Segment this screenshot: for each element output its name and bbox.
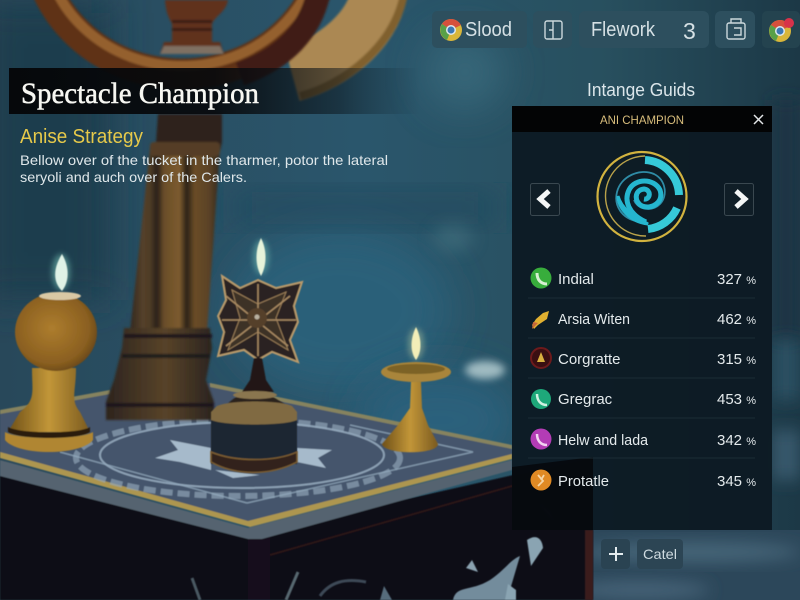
button: Slood: [432, 11, 527, 48]
panel header: ANI CHAMPION: [600, 113, 684, 127]
row: Arsia Witen: 462 %: [717, 311, 756, 328]
row: Arsia Witen: [532, 311, 756, 329]
row: Helw and lada: Helw and lada: [558, 432, 649, 449]
fluted column: [106, 114, 222, 420]
table: [0, 383, 593, 600]
description: seryoli and auch over of the Calers.: [20, 169, 247, 185]
left gold candle: [5, 254, 97, 452]
row: Indial: 327 %: [717, 271, 756, 288]
stat rows: [530, 268, 756, 490]
button: Flework: 3: [683, 18, 696, 44]
top toolbar: [432, 11, 800, 48]
row: Indial: Indial: [558, 271, 594, 288]
row: Protatle: 345 %: [717, 473, 756, 490]
panel: champion: [512, 106, 772, 530]
button: Flework: [579, 11, 709, 48]
button: Slood: Slood: [465, 19, 512, 41]
button: browser badge: [762, 11, 800, 48]
central star ornament: [211, 238, 302, 472]
front bronze ring: [36, 0, 328, 74]
carved table leg: [192, 504, 593, 600]
flame: [52, 254, 70, 291]
flame: [408, 327, 424, 360]
panel heading: Intange Guids: [587, 80, 695, 100]
subheading: Anise Strategy: [20, 126, 143, 148]
finial behind ring: [160, 0, 228, 54]
row: Corgratte: Corgratte: [558, 351, 621, 368]
title: Spectacle Champion: [21, 77, 259, 110]
table cloth ornament: [60, 420, 473, 503]
description: Bellow over of the tucket in the tharmer, potor the lateral: [20, 152, 388, 168]
row: Corgratte: 315 %: [717, 351, 756, 368]
add button: [601, 539, 630, 569]
row: Helw and lada: [530, 428, 756, 450]
row: Gregrac: 453 %: [717, 391, 756, 408]
icon button: clipboard: [715, 11, 755, 48]
button: Flework: Flework: [591, 19, 656, 41]
cancel button: Catel: [643, 546, 677, 562]
panel header: [512, 106, 772, 132]
description: [20, 152, 388, 185]
table body: [0, 457, 593, 600]
previous arrow: [530, 184, 560, 216]
row: Protatle: Protatle: [558, 473, 609, 490]
rear gold ring: [292, 0, 404, 96]
right brass lamp: [381, 327, 451, 452]
next arrow: [724, 184, 754, 216]
champion emblem: [598, 152, 686, 241]
row: Gregrac: Gregrac: [558, 391, 613, 408]
icon button: panel: [533, 11, 572, 48]
row: Corgratte: [531, 348, 756, 368]
gold border: [0, 452, 512, 527]
table top: [0, 383, 512, 525]
flame: [253, 238, 269, 276]
title bar: [9, 68, 420, 114]
row: Helw and lada: 342 %: [717, 432, 756, 449]
table edge band: [0, 460, 512, 539]
row: Indial: [530, 268, 756, 288]
row: Arsia Witen: Arsia Witen: [558, 311, 630, 328]
row: Protatle: [530, 470, 756, 490]
row: Gregrac: [531, 389, 756, 409]
cancel button: [637, 539, 683, 569]
